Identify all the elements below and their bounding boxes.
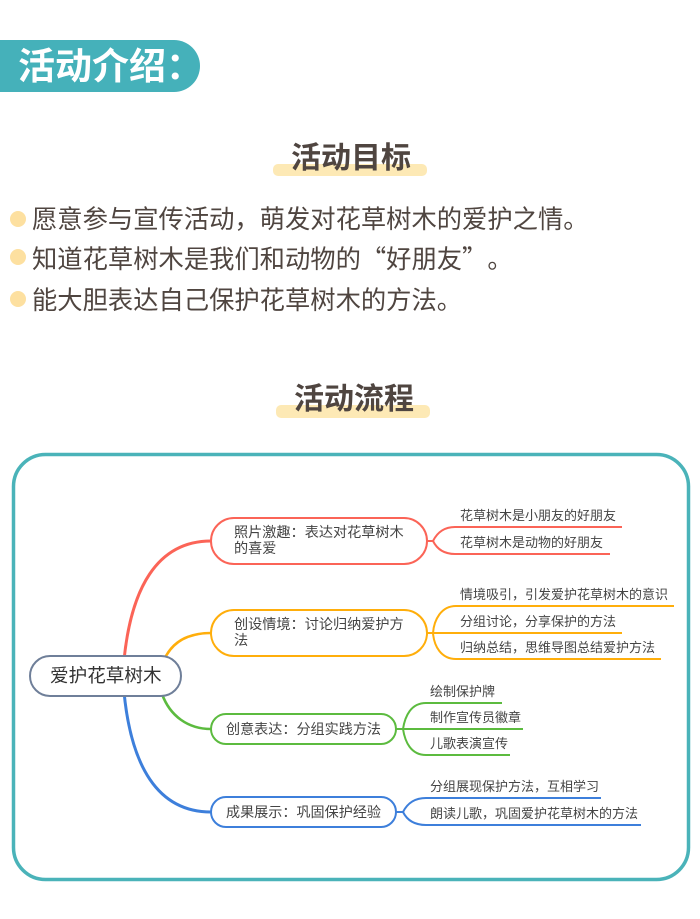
goal 1: 愿意参与宣传活动，萌发对花草树木的爱护之情。 [32,200,589,236]
node: 创设情境: 创设情境：讨论归纳爱护方 [234,614,404,634]
leaves: 创设情境: 归纳总结，思维导图总结爱护方法 [460,637,655,656]
node: 创意表达: 创意表达：分组实践方法 [226,719,381,739]
leaves: 创意表达: 儿歌表演宣传 [430,733,508,752]
leaves: 成果展示: 分组展现保护方法，互相学习 [430,776,599,795]
goal 2: 知道花草树木是我们和动物的“好朋友”。 [32,240,513,276]
leaves: 照片激趣: 花草树木是动物的好朋友 [460,532,603,551]
leaves: 成果展示: 朗读儿歌，巩固爱护花草树木的方法 [430,803,638,822]
goal 3: 能大胆表达自己保护花草树木的方法。 [32,281,462,317]
node: 成果展示 [211,797,396,827]
leaves: 照片激趣 [427,505,622,554]
branch: green [162,681,523,755]
root node: 爱护花草树木 [30,656,181,696]
leaves: 创设情境: 分组讨论，分享保护的方法 [460,611,616,630]
node: 创设情境 [211,610,427,656]
leaves: 创意表达: 绘制保护牌 [430,681,495,700]
node: 创意表达 [211,714,396,744]
node: 成果展示: 成果展示：巩固保护经验 [226,802,381,822]
heading: 活动流程: 活动流程 [294,374,414,418]
leaves: 照片激趣: 花草树木是小朋友的好朋友 [460,505,616,524]
node: 照片激趣: 的喜爱 [234,538,276,558]
leaves: 创设情境 [427,584,674,659]
heading: 活动目标: 活动目标 [291,133,411,177]
branch: blue [124,692,641,827]
leaves: 成果展示 [396,776,641,825]
node: 照片激趣 [211,518,427,564]
root node: 爱护花草树木: 爱护花草树木 [50,661,162,688]
node: 照片激趣: 照片激趣：表达对花草树木 [234,522,404,542]
node: 创设情境: 法 [234,630,248,650]
banner: 活动介绍: 活动介绍： [18,36,203,90]
branch: orange [164,584,674,660]
branch: red [124,505,622,660]
leaves: 创设情境: 情境吸引，引发爱护花草树木的意识 [460,584,668,603]
leaves: 创意表达 [396,681,523,755]
goals list [10,200,589,317]
leaves: 创意表达: 制作宣传员徽章 [430,707,521,726]
panel: mind map [14,454,688,880]
